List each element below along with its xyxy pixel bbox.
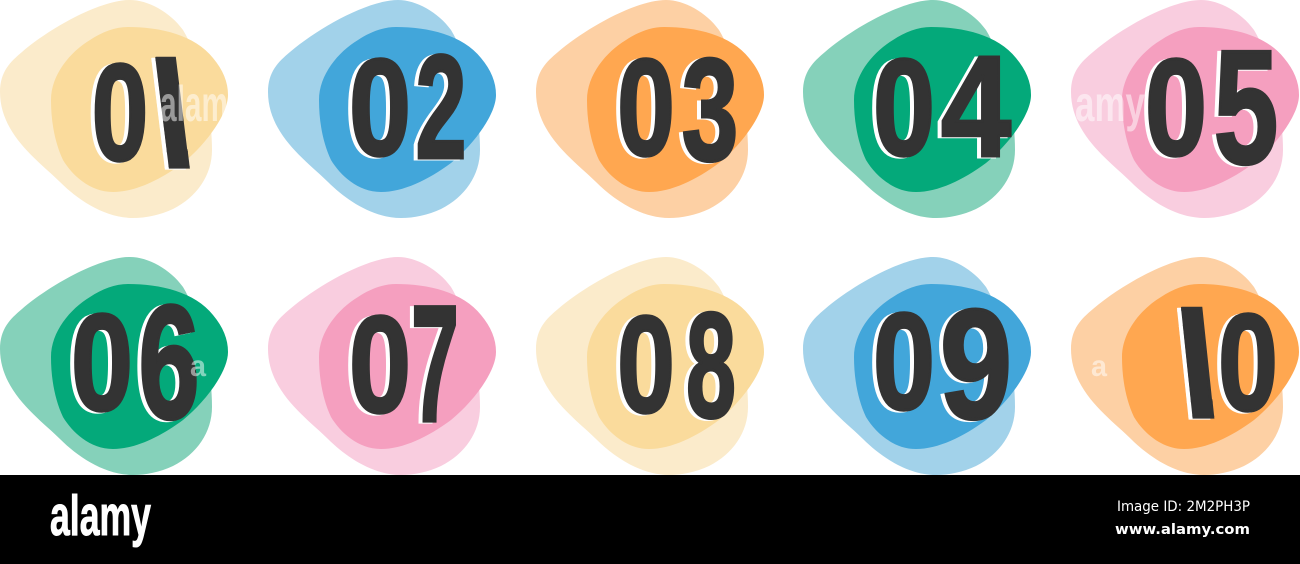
badge 06: 6 xyxy=(138,273,200,453)
badge 09: 9 xyxy=(940,278,1012,452)
badge 02: 2 xyxy=(415,25,467,190)
badge 05: amy xyxy=(1075,76,1145,132)
footer logo: alamy xyxy=(50,484,151,548)
badge 03: 3 xyxy=(682,28,738,191)
badge 06: 0 xyxy=(71,285,133,440)
badge 07: 0 xyxy=(349,287,411,442)
badge 06: a xyxy=(190,350,206,383)
badge 01: 1 xyxy=(118,24,218,201)
badge 04 xyxy=(803,0,1031,218)
badge 01: alam xyxy=(160,76,228,132)
badge 03 xyxy=(536,0,764,218)
badge 04: 0 xyxy=(873,30,935,185)
badge 10: 0 xyxy=(1218,286,1278,440)
badge 08: 8 xyxy=(686,282,736,450)
footer bar xyxy=(0,475,1300,564)
badge 08: 0 xyxy=(617,287,675,441)
badge 03: 0 xyxy=(617,30,675,184)
badge 01: 0 xyxy=(92,35,148,190)
badge 09 xyxy=(803,257,1031,475)
website: www.alamy.com xyxy=(1115,522,1250,538)
badge 01 xyxy=(0,0,228,218)
badge 09: 0 xyxy=(873,284,935,439)
badge 07: 7 xyxy=(411,272,459,457)
badge 04: 4 xyxy=(941,26,1011,187)
badge 05: 5 xyxy=(1214,16,1278,197)
badge 08 xyxy=(536,257,764,475)
image id: Image ID: 2M2PH3P xyxy=(1117,499,1250,515)
badge 10 xyxy=(1071,257,1299,475)
badge 10: a xyxy=(1091,350,1107,383)
badge 05 xyxy=(1071,0,1299,218)
badge 02: 0 xyxy=(349,30,411,185)
badge 10: 1 xyxy=(1144,275,1243,451)
badge 05: 0 xyxy=(1145,30,1207,185)
badge 02 xyxy=(268,0,496,218)
badge 07 xyxy=(268,257,496,475)
badge 06 xyxy=(0,257,228,475)
